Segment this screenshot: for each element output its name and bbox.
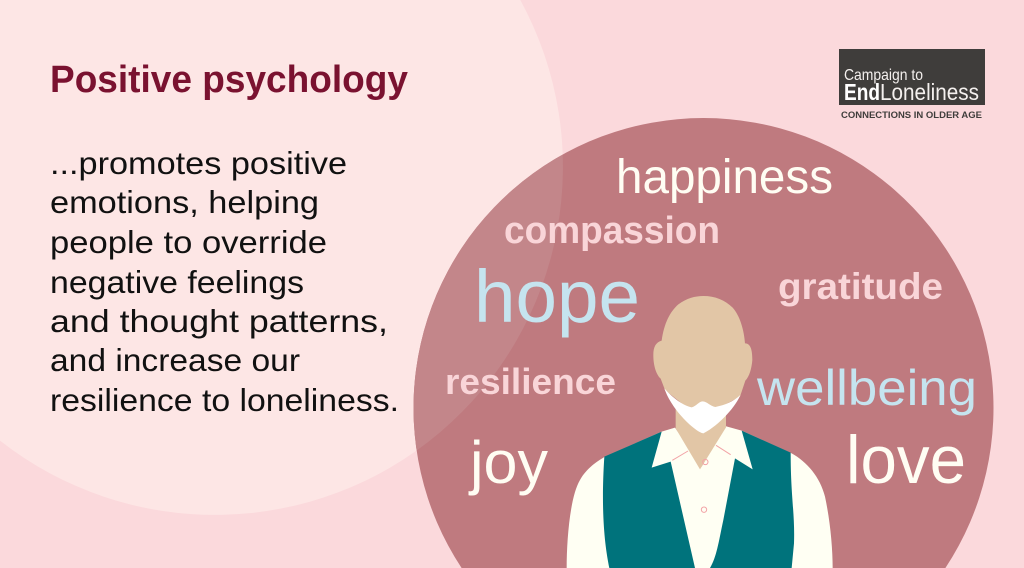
shirt <box>567 426 833 568</box>
word cloud <box>445 151 977 498</box>
logo: Campaign to End Loneliness: CONNECTIONS IN OLDER AGE <box>841 110 982 121</box>
logo: Campaign to End Loneliness: End <box>844 79 880 105</box>
neck <box>676 403 726 469</box>
word cloud: joy <box>468 429 548 496</box>
text block: description <box>50 145 399 418</box>
text block: description: ...promotes positive <box>50 145 347 181</box>
text block: description: negative feelings <box>50 264 304 300</box>
beard <box>664 388 740 433</box>
panel: circle overlap <box>414 154 563 450</box>
panel: large rose circle <box>414 118 994 568</box>
waistcoat <box>603 431 794 568</box>
word cloud: love <box>846 422 966 498</box>
word cloud: wellbeing <box>756 360 977 416</box>
logo: Campaign to End Loneliness: Campaign to <box>844 67 923 84</box>
text block: description: and thought patterns, <box>50 303 388 339</box>
word cloud: resilience <box>445 361 616 402</box>
collar lines <box>672 445 731 460</box>
word cloud: hope <box>474 255 640 338</box>
text block: description: people to override <box>50 224 327 260</box>
text block: description: emotions, helping <box>50 184 319 220</box>
logo: Campaign to End Loneliness: Loneliness <box>880 79 979 105</box>
panel: light background circle <box>0 0 563 515</box>
word cloud: happiness <box>616 151 833 204</box>
icon: man in waistcoat <box>567 296 833 568</box>
logo: Campaign to End Loneliness <box>839 49 985 121</box>
word cloud: gratitude <box>778 266 943 307</box>
text block: description: and increase our <box>50 342 300 378</box>
buttons <box>701 459 708 512</box>
text block: description: resilience to loneliness. <box>50 382 399 418</box>
word cloud: compassion <box>504 210 720 252</box>
title: Positive psychology <box>50 59 408 101</box>
head <box>653 296 752 410</box>
